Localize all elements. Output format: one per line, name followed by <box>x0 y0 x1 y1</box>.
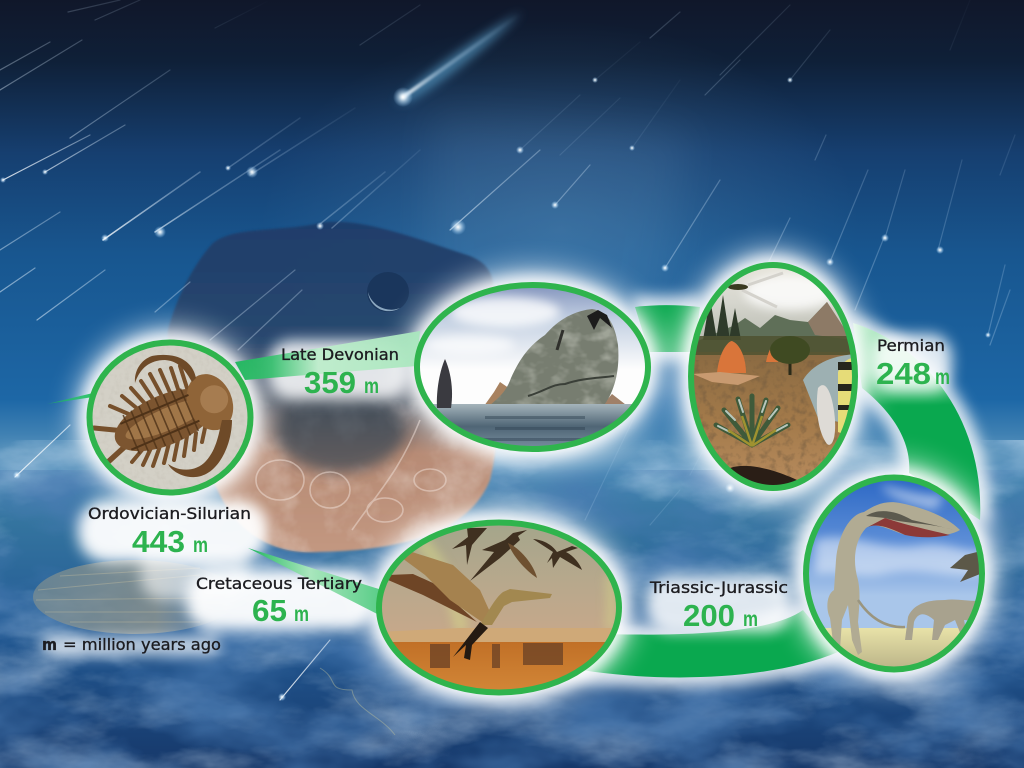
ribbon halos <box>548 296 990 688</box>
mountains <box>696 302 850 352</box>
label: Cretaceous Tertiary 65 m: m <box>294 603 309 626</box>
legend: m = million years ago: = million years ago <box>63 635 221 654</box>
small tree <box>788 364 792 375</box>
meteor tail glow <box>395 12 522 102</box>
striped beetle <box>838 358 852 433</box>
trilobite horns <box>135 355 196 383</box>
canyon <box>393 642 605 690</box>
ellipse: Dunkleosteus (Late Devonian) <box>415 282 651 454</box>
label: Cretaceous Tertiary 65 m: Cretaceous Tertiary <box>196 574 362 593</box>
big dinosaur <box>827 502 960 655</box>
rainbow arcs <box>420 540 462 632</box>
conifers <box>703 295 741 340</box>
circle: trilobite (Ordovician-Silurian) <box>85 338 255 498</box>
label: Permian 248 m: Permian <box>877 336 945 355</box>
small dinosaur <box>905 600 976 640</box>
cycad plant <box>716 396 788 445</box>
meteor heads <box>0 77 991 701</box>
third dinosaur head <box>950 552 979 582</box>
ellipse: pterosaurs (Cretaceous-Tertiary) <box>376 520 624 700</box>
label: Late Devonian 359 m: Late Devonian <box>281 345 399 364</box>
label: Cretaceous Tertiary 65 m <box>196 574 362 628</box>
label: Permian 248 m: m <box>935 366 950 389</box>
dragonfly <box>742 273 783 307</box>
ground <box>694 354 850 480</box>
label: Triassic-Jurassic 200 m <box>649 578 788 633</box>
label: Ordovician-Silurian 443 m: Ordovician-Silurian <box>88 504 251 523</box>
large pterosaur head and neck <box>480 589 552 625</box>
label: Late Devonian 359 m: m <box>364 375 379 398</box>
legend: m = million years ago: m <box>42 635 57 654</box>
brown wing of pterosaur B <box>508 543 537 578</box>
sea <box>433 404 632 446</box>
impact disc <box>33 560 237 634</box>
ribbon: Devonian to Permian <box>635 305 700 352</box>
label: Permian 248 m: 248 <box>876 356 931 391</box>
dark fin <box>437 359 452 408</box>
water <box>803 354 851 422</box>
large pterosaur wings <box>388 574 477 622</box>
trilobite body <box>114 374 234 454</box>
label: Late Devonian 359 m <box>281 345 399 400</box>
label backdrops <box>42 334 952 656</box>
label: Triassic-Jurassic 200 m: 200 <box>683 598 735 633</box>
large meteor core <box>403 14 520 97</box>
fish head <box>487 309 618 408</box>
ribbon: Triassic to Cretaceous <box>556 610 838 677</box>
insect wing <box>817 385 835 445</box>
flying pterosaurs <box>452 528 582 581</box>
ellipse: Permian landscape <box>688 262 860 492</box>
label: Cretaceous Tertiary 65 m: 65 <box>252 593 287 628</box>
asteroid <box>168 222 510 570</box>
label: Ordovician-Silurian 443 m: 443 <box>132 524 185 559</box>
trilobite spines lower <box>94 428 205 466</box>
ellipse: Coelophysis (Triassic-Jurassic) <box>803 475 987 674</box>
white halos around circles <box>68 242 1005 716</box>
burrow <box>730 466 797 485</box>
dimetrodon <box>717 341 746 373</box>
large pterosaur legs <box>453 622 488 660</box>
label: Permian 248 m <box>876 336 950 391</box>
label: Late Devonian 359 m: 359 <box>304 365 356 400</box>
label: Ordovician-Silurian 443 m <box>88 504 251 559</box>
label: Triassic-Jurassic 200 m: Triassic-Jurassic <box>649 578 788 597</box>
back fin <box>486 382 507 404</box>
ribbon: Cretaceous wedge <box>248 548 385 618</box>
trilobite spines upper <box>110 366 187 415</box>
label: Ordovician-Silurian 443 m: m <box>193 534 208 557</box>
label: Triassic-Jurassic 200 m: m <box>743 608 758 631</box>
ribbon: Ordovician to Devonian <box>235 331 420 380</box>
ribbon: Permian to Triassic <box>853 323 980 520</box>
ribbon: start wedge to trilobite <box>47 393 93 404</box>
